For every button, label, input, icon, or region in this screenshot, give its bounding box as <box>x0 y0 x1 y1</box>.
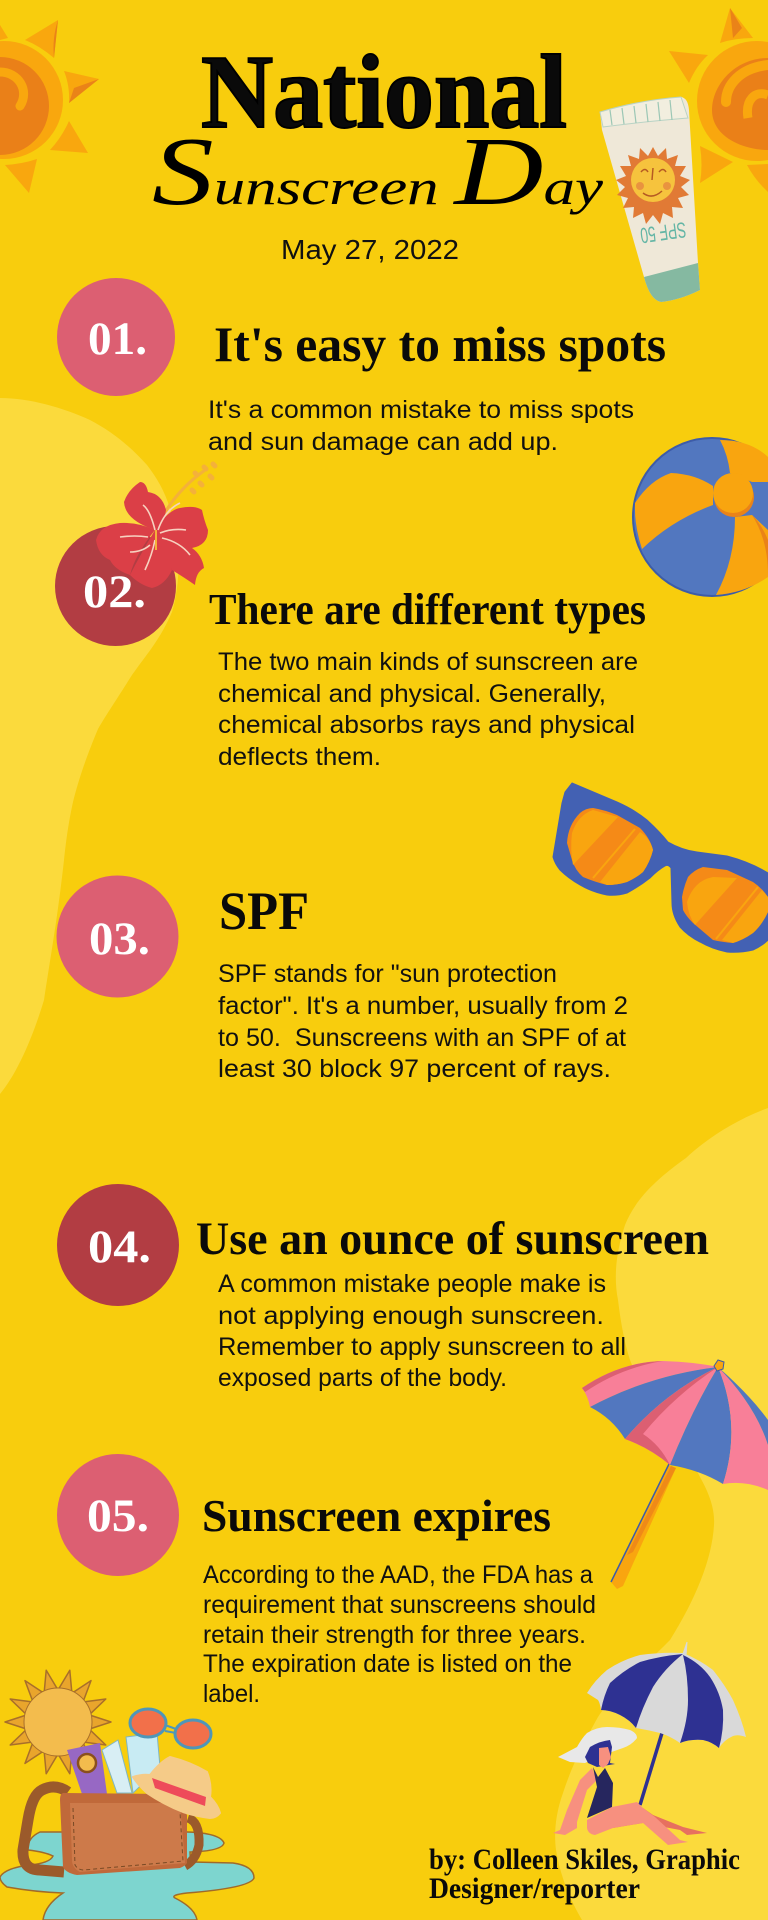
illustration: woman under beach umbrella <box>553 1642 746 1845</box>
umbrella canopy <box>587 1642 746 1748</box>
puddle <box>0 1832 254 1920</box>
credit line: Designer/reporter <box>429 1872 640 1905</box>
body text 2: The two main kinds of sunscreen are <box>218 648 638 676</box>
bag body <box>60 1793 187 1875</box>
body text 4 <box>218 1270 626 1392</box>
title: Sunscreen Day: S unscreen D ay <box>152 118 604 226</box>
body text 5: The expiration date is listed on the <box>203 1650 572 1678</box>
body text 2: deflects them. <box>218 743 381 771</box>
number badge 03 <box>56 876 178 998</box>
far leg <box>613 1808 707 1835</box>
near leg <box>587 1802 688 1845</box>
body text 1: and sun damage can add up. <box>208 428 558 456</box>
body text 5: According to the AAD, the FDA has a <box>203 1561 593 1589</box>
icon: hibiscus flower <box>96 464 215 588</box>
heading 3: SPF <box>219 881 309 941</box>
icon: sun top left <box>0 20 99 193</box>
tube label: SPF 50 <box>639 217 688 248</box>
number badge 05 <box>57 1454 179 1576</box>
panel: item 5 <box>57 1454 596 1708</box>
body text 1 <box>208 396 634 456</box>
title: National: National <box>201 33 567 150</box>
swimsuit <box>587 1767 613 1818</box>
panel: item 2 <box>83 566 646 771</box>
body text 3 <box>218 960 628 1083</box>
heading 1: It's easy to miss spots <box>214 316 666 372</box>
small sunglasses <box>130 1709 211 1748</box>
sun <box>5 1670 111 1774</box>
body text 4: exposed parts of the body. <box>218 1364 507 1392</box>
body text 5: requirement that sunscreens should <box>203 1591 596 1619</box>
sun hat <box>558 1727 637 1763</box>
body text 5 <box>203 1561 596 1708</box>
body text 2 <box>218 648 638 771</box>
illustration: travel bag with sun and puddle <box>0 1670 254 1920</box>
body text 4: A common mistake people make is <box>218 1270 606 1298</box>
number badge 02 circle <box>55 526 176 646</box>
icon: sunscreen tube <box>600 97 700 302</box>
body text 2: chemical absorbs rays and physical <box>218 711 635 739</box>
heading 5: Sunscreen expires <box>202 1491 551 1541</box>
tube sun face <box>616 147 690 224</box>
body text 3: SPF stands for "sun protection <box>218 960 557 988</box>
body text 3: factor". It's a number, usually from 2 <box>218 992 628 1020</box>
boarding passes <box>102 1733 160 1793</box>
credit line <box>429 1843 740 1905</box>
purple ticket <box>67 1743 107 1794</box>
hair and face <box>585 1740 615 1768</box>
umbrella pole <box>640 1733 662 1805</box>
body text 5: label. <box>203 1680 260 1708</box>
body text 5: retain their strength for three years. <box>203 1621 586 1649</box>
body text 1: It's a common mistake to miss spots <box>208 396 634 424</box>
number badge 01: 01. <box>88 313 147 365</box>
icon: beach ball <box>633 438 768 596</box>
panel: item 4 <box>57 1184 709 1392</box>
body text 4: not applying enough sunscreen. <box>218 1302 604 1330</box>
body text 3: to 50. Sunscreens with an SPF of at <box>218 1024 626 1052</box>
body text 3: least 30 block 97 percent of rays. <box>218 1055 611 1083</box>
icon: sunglasses <box>553 783 768 952</box>
number badge 02: 02. <box>83 566 146 618</box>
arm <box>553 1768 597 1835</box>
number badge 04: 04. <box>88 1221 151 1273</box>
number badge 04 <box>57 1184 179 1306</box>
icon: pink and blue umbrella <box>582 1360 768 1589</box>
hat <box>133 1757 220 1818</box>
panel: item 1 <box>57 278 666 456</box>
panel: item 3 <box>56 876 628 1083</box>
body text 2: chemical and physical. Generally, <box>218 680 606 708</box>
heading 2: There are different types <box>209 585 646 634</box>
icon: sun top right <box>669 8 768 192</box>
number badge 01 <box>57 278 175 396</box>
number badge 03: 03. <box>89 913 150 965</box>
background shape: left blob <box>0 398 178 1094</box>
date: May 27, 2022 <box>281 234 459 265</box>
number badge 05: 05. <box>87 1490 149 1542</box>
background shape: right blob <box>555 1108 768 1920</box>
heading 4: Use an ounce of sunscreen <box>196 1213 709 1265</box>
strap <box>23 1787 199 1872</box>
body text 4: Remember to apply sunscreen to all <box>218 1333 626 1361</box>
